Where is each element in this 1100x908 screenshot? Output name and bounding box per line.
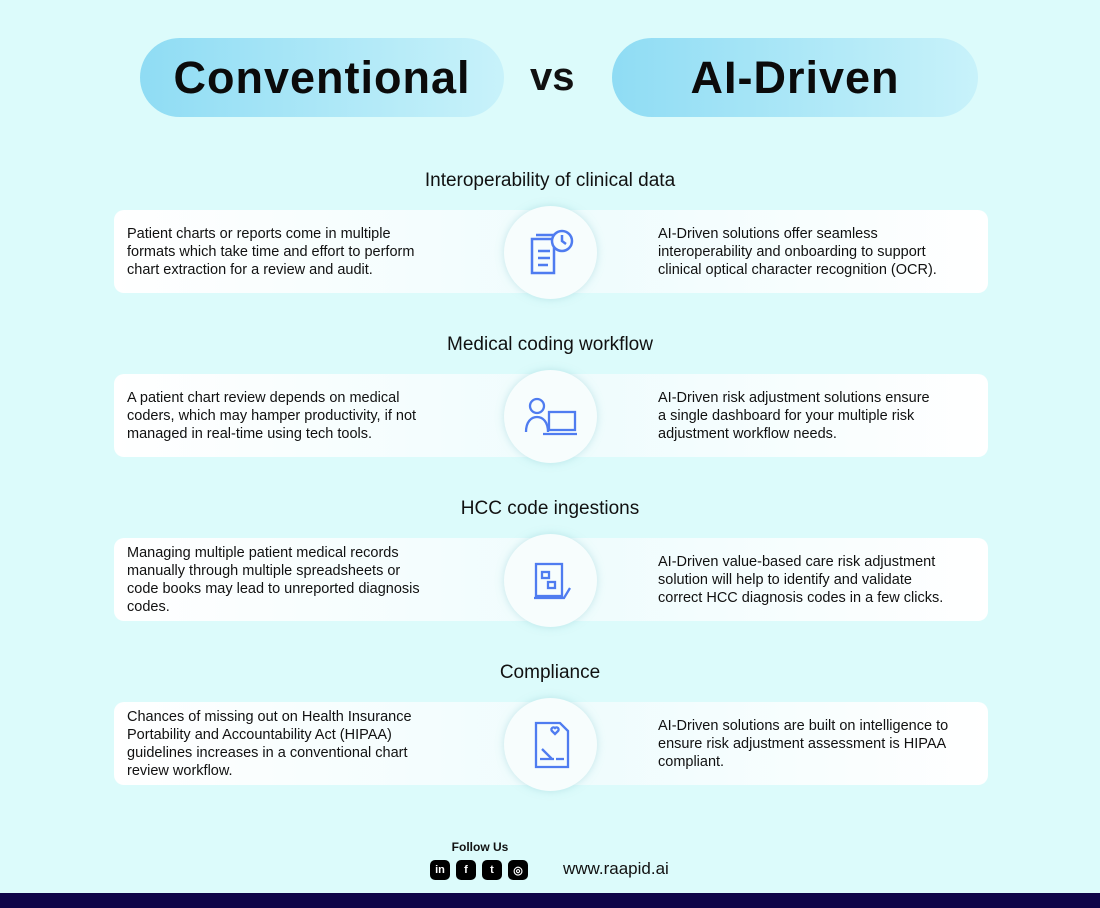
vs: vs	[530, 55, 574, 99]
card: conventional compliance: Chances of missing out on Health Insurance	[127, 708, 412, 724]
footer: social icons: ◎	[513, 864, 523, 876]
heading: hcc: HCC code ingestions	[461, 498, 639, 519]
heading: compliance: Compliance	[500, 662, 600, 683]
heading: medical coding: Medical coding workflow	[447, 334, 653, 355]
card: ai coding: AI-Driven risk adjustment solutions ensure	[658, 390, 930, 406]
pill: conventional: Conventional	[173, 52, 470, 102]
card: conventional coding: coders, which may hamper productivity, if not	[127, 408, 416, 424]
icon: coder at computer	[504, 370, 597, 463]
card: ai interoperability	[560, 210, 988, 293]
card: conventional coding	[114, 374, 594, 457]
card: conventional compliance	[114, 702, 594, 785]
card: ai interoperability: interoperability and onboarding to support	[658, 244, 926, 260]
footer: social icons	[430, 860, 528, 880]
icon: legal document	[504, 698, 597, 791]
footer: social icons: f	[464, 864, 468, 876]
footer: social icons: in	[435, 864, 445, 876]
card: conventional hcc: Managing multiple patient medical records	[127, 544, 399, 560]
card: conventional interoperability	[114, 210, 594, 293]
card: ai compliance: ensure risk adjustment assessment is HIPAA	[658, 736, 946, 752]
card: ai interoperability: AI-Driven solutions offer seamless	[658, 226, 878, 242]
card: ai hcc: correct HCC diagnosis codes in a few clicks.	[658, 590, 943, 606]
card: conventional interoperability: formats which take time and effort to perform	[127, 244, 414, 260]
card: conventional hcc: manually through multiple spreadsheets or	[127, 562, 400, 578]
card: conventional coding: managed in real-time using tech tools.	[127, 426, 372, 442]
heading: interoperability: Interoperability of clinical data	[425, 170, 675, 191]
card: conventional hcc: code books may lead to unreported diagnosis	[127, 580, 420, 596]
card: conventional compliance: review workflow.	[127, 762, 233, 778]
card: conventional hcc	[114, 538, 594, 621]
card: ai coding	[560, 374, 988, 457]
card: ai compliance: compliant.	[658, 754, 724, 770]
pill: conventional	[140, 38, 504, 117]
card: conventional interoperability: Patient charts or reports come in multiple	[127, 226, 391, 242]
footer: url: www.raapid.ai	[563, 859, 669, 878]
card: conventional compliance: Portability and Accountability Act (HIPAA)	[127, 726, 392, 742]
pill: ai-driven	[612, 38, 978, 117]
card: ai compliance	[560, 702, 988, 785]
card: conventional compliance: guidelines increases in a conventional chart	[127, 744, 408, 760]
card: ai interoperability: clinical optical character recognition (OCR).	[658, 262, 937, 278]
card: ai hcc: AI-Driven value-based care risk adjustment	[658, 554, 935, 570]
card: ai hcc: solution will help to identify and validate	[658, 572, 912, 588]
card: conventional interoperability: chart extraction for a review and audit.	[127, 262, 373, 278]
footer: social icons: t	[490, 864, 494, 876]
footer: follow us: Follow Us	[452, 840, 508, 854]
pill: ai-driven: AI-Driven	[690, 52, 900, 102]
card: ai hcc	[560, 538, 988, 621]
footer bar	[0, 893, 1100, 908]
card: ai compliance: AI-Driven solutions are built on intelligence to	[658, 718, 948, 734]
card: ai coding: adjustment workflow needs.	[658, 426, 837, 442]
icon: document clock	[504, 206, 597, 299]
card: ai coding: a single dashboard for your multiple risk	[658, 408, 914, 424]
card: conventional coding: A patient chart review depends on medical	[127, 390, 399, 406]
icon: folder codes	[504, 534, 597, 627]
card: conventional hcc: codes.	[127, 598, 170, 614]
